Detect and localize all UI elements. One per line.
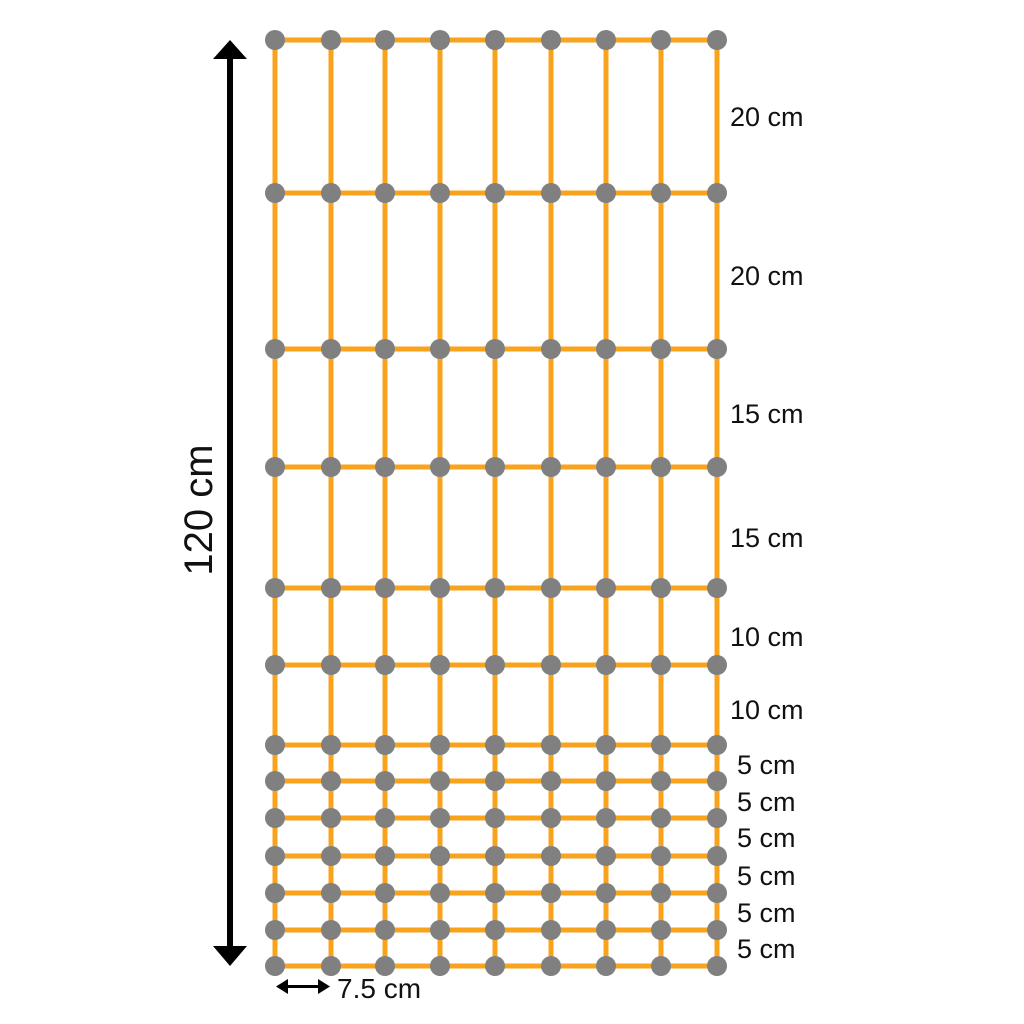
spacing labels: 5 cm	[737, 823, 796, 853]
spacing labels: 20 cm	[730, 102, 804, 132]
spacing labels: 5 cm	[737, 898, 796, 928]
mesh grid	[275, 40, 717, 966]
spacing labels	[730, 102, 804, 964]
spacing labels: 5 cm	[737, 750, 796, 780]
mesh knots	[265, 30, 727, 976]
spacing labels: 5 cm	[737, 787, 796, 817]
spacing labels: 5 cm	[737, 934, 796, 964]
spacing labels: 20 cm	[730, 261, 804, 291]
arrow: height	[213, 40, 247, 966]
spacing labels: 15 cm	[730, 523, 804, 553]
label: 120 cm: 120 cm	[177, 444, 221, 576]
arrow: column width 7.5 cm	[276, 973, 421, 1004]
arrow: column width 7.5 cm: 7.5 cm	[337, 973, 421, 1004]
spacing labels: 15 cm	[730, 399, 804, 429]
spacing labels: 10 cm	[730, 695, 804, 725]
spacing labels: 10 cm	[730, 622, 804, 652]
spacing labels: 5 cm	[737, 861, 796, 891]
